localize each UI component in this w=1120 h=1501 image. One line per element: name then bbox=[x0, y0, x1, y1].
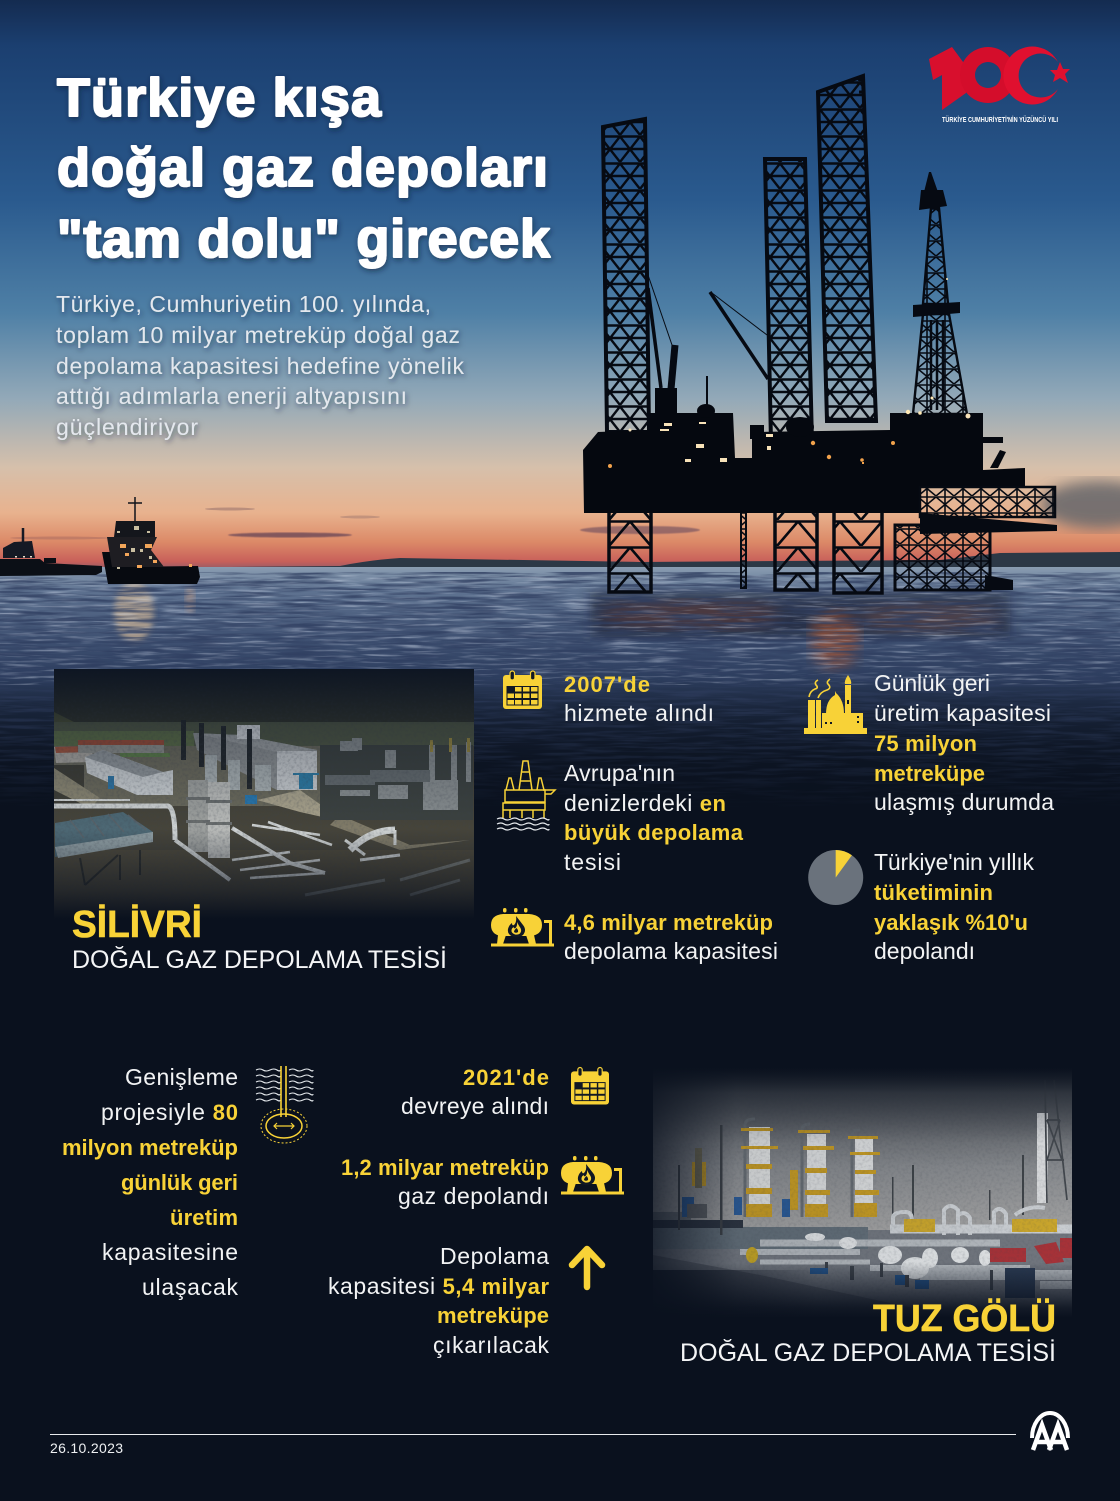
title bbox=[57, 68, 551, 269]
distant land bbox=[230, 552, 1120, 567]
fact: capacity increase: Depolama bbox=[440, 1243, 549, 1269]
fact: capacity increase: metreküpe bbox=[437, 1303, 549, 1328]
icon: calendar bbox=[503, 671, 542, 709]
fact: storage capacity: 4,6 milyar metreküp bbox=[564, 910, 773, 935]
sea bbox=[0, 567, 1120, 807]
fact: capacity increase: kapasitesi 5,4 milyar bbox=[328, 1273, 549, 1299]
title: Türkiye kışa bbox=[57, 68, 382, 128]
fact: commissioning year: 2007'de bbox=[564, 672, 650, 697]
lower fade into page colour bbox=[0, 680, 1120, 810]
rig lights bbox=[608, 278, 970, 468]
fact: share of annual consumption: tüketiminin bbox=[874, 880, 993, 905]
facility subtitle: DOĞAL GAZ DEPOLAMA TESİSİ bbox=[680, 1338, 1056, 1367]
logo: AA agency bbox=[1032, 1413, 1068, 1450]
fact: expansion project: Genişleme bbox=[125, 1064, 238, 1090]
fact: stored gas: gaz depolandı bbox=[398, 1183, 549, 1209]
intro paragraph bbox=[56, 291, 464, 440]
logo: Republic 100th anniversary bbox=[929, 47, 1070, 124]
icon: up arrow bbox=[572, 1249, 602, 1287]
fact: largest storage in Europe's seas: tesisi bbox=[564, 849, 621, 875]
sky bbox=[0, 0, 1120, 570]
rig deck and superstructure bbox=[583, 388, 1025, 513]
title: doğal gaz depoları bbox=[57, 138, 548, 198]
facts: Tuz Gölü middle column bbox=[328, 1065, 624, 1358]
crescent zero bbox=[1003, 47, 1058, 105]
pipework bbox=[740, 1206, 1072, 1298]
fact: daily withdrawal capacity: üretim kapasitesi bbox=[874, 700, 1051, 726]
rig legs below the deck bbox=[609, 510, 1013, 593]
fact: largest storage in Europe's seas: büyük depolama bbox=[564, 820, 744, 845]
right deck lattice bbox=[920, 487, 1057, 534]
facts: Tuz Gölü left column bbox=[62, 1064, 313, 1300]
fact: storage capacity bbox=[564, 910, 778, 964]
fact: commissioning year: 2021'de bbox=[463, 1065, 549, 1090]
clouds bbox=[10, 481, 1120, 540]
icon: salt cavern well bbox=[256, 1066, 313, 1143]
photo: Tuz Gölü plant bbox=[653, 1068, 1072, 1325]
fact: share of annual consumption bbox=[874, 849, 1034, 964]
icon: calendar bbox=[571, 1067, 609, 1105]
towers bbox=[678, 1102, 1068, 1235]
fact: daily withdrawal capacity: metreküpe bbox=[874, 761, 985, 786]
hero photo: offshore gas rig at sunset bbox=[0, 0, 1120, 810]
fact: commissioning year bbox=[564, 672, 714, 726]
fact: largest storage in Europe's seas: Avrupa'nın bbox=[564, 760, 675, 786]
fact: commissioning year bbox=[401, 1065, 549, 1119]
lattice tower 1 bbox=[603, 119, 649, 432]
cranes bbox=[648, 275, 768, 405]
tugboat bbox=[102, 497, 200, 584]
facts: Silivri right column bbox=[804, 670, 1054, 964]
facility name: SİLİVRİ bbox=[72, 904, 202, 946]
fact: largest storage in Europe's seas bbox=[564, 760, 744, 875]
icon: gas tank bbox=[491, 908, 554, 946]
fact: storage capacity: depolama kapasitesi bbox=[564, 938, 778, 964]
icon: pie chart 10 percent bbox=[808, 850, 863, 905]
intro paragraph: Türkiye, Cumhuriyetin 100. yılında, bbox=[56, 291, 431, 317]
fact: share of annual consumption: depolandı bbox=[874, 938, 975, 964]
icon: gas plant and mosque bbox=[804, 675, 867, 734]
water reflections bbox=[114, 582, 1010, 668]
digit 0 bbox=[960, 47, 1016, 103]
drilling derrick bbox=[913, 172, 967, 414]
fact: expansion project: projesiyle 80 bbox=[101, 1099, 238, 1125]
panel: Silivri facility bbox=[54, 669, 474, 974]
icon: gas tank bbox=[561, 1156, 624, 1194]
intro paragraph: depolama kapasitesi hedefine yönelik bbox=[56, 353, 464, 379]
icon: offshore platform bbox=[497, 761, 555, 830]
date: 26.10.2023 bbox=[50, 1440, 123, 1456]
fact: commissioning year: hizmete alındı bbox=[564, 700, 714, 726]
intro paragraph: attığı adımlarla enerji altyapısını bbox=[56, 383, 407, 409]
fact: commissioning year: devreye alındı bbox=[401, 1093, 549, 1119]
fact: expansion project: ulaşacak bbox=[142, 1274, 238, 1300]
lattice tower 2 bbox=[765, 159, 812, 442]
distant vessel bbox=[0, 528, 102, 576]
fact: largest storage in Europe's seas: denizlerdeki en bbox=[564, 790, 726, 816]
facility name: TUZ GÖLÜ bbox=[873, 1297, 1056, 1340]
lattice tower 3 bbox=[818, 76, 876, 421]
fact: daily withdrawal capacity: 75 milyon bbox=[874, 731, 977, 756]
photo: Silivri plant bbox=[54, 669, 474, 927]
fact: capacity increase: çıkarılacak bbox=[433, 1332, 550, 1358]
intro paragraph: toplam 10 milyar metreküp doğal gaz bbox=[56, 322, 460, 348]
title: "tam dolu" girecek bbox=[57, 209, 551, 269]
facility subtitle: DOĞAL GAZ DEPOLAMA TESİSİ bbox=[72, 945, 447, 974]
fact: share of annual consumption: yaklaşık %10'u bbox=[874, 910, 1028, 935]
fact: capacity increase bbox=[328, 1243, 550, 1358]
digit 1 bbox=[929, 47, 966, 110]
fact: stored gas: 1,2 milyar metreküp bbox=[341, 1155, 549, 1180]
logo caption: TÜRKİYE CUMHURİYETİ'NİN YÜZÜNCÜ YILI bbox=[942, 115, 1058, 124]
water ripples bbox=[0, 572, 1120, 807]
intro paragraph: güçlendiriyor bbox=[56, 414, 198, 440]
fact: stored gas bbox=[341, 1155, 549, 1209]
footer bbox=[50, 1413, 1068, 1456]
fact: expansion project: kapasitesine bbox=[102, 1239, 238, 1265]
fact: daily withdrawal capacity: Günlük geri bbox=[874, 670, 990, 696]
panel: Tuz Gölü facility bbox=[653, 1068, 1072, 1367]
fact: expansion project: üretim bbox=[170, 1205, 238, 1230]
fact: share of annual consumption: Türkiye'nin yıllık bbox=[874, 849, 1034, 875]
fact: daily withdrawal capacity bbox=[874, 670, 1054, 815]
fact: expansion project: milyon metreküp bbox=[62, 1135, 238, 1160]
fact: daily withdrawal capacity: ulaşmış durumda bbox=[874, 789, 1054, 815]
fact: expansion project bbox=[62, 1064, 238, 1300]
fact: expansion project: günlük geri bbox=[121, 1170, 238, 1195]
star bbox=[1050, 62, 1070, 83]
facts: Silivri left column bbox=[491, 671, 778, 964]
